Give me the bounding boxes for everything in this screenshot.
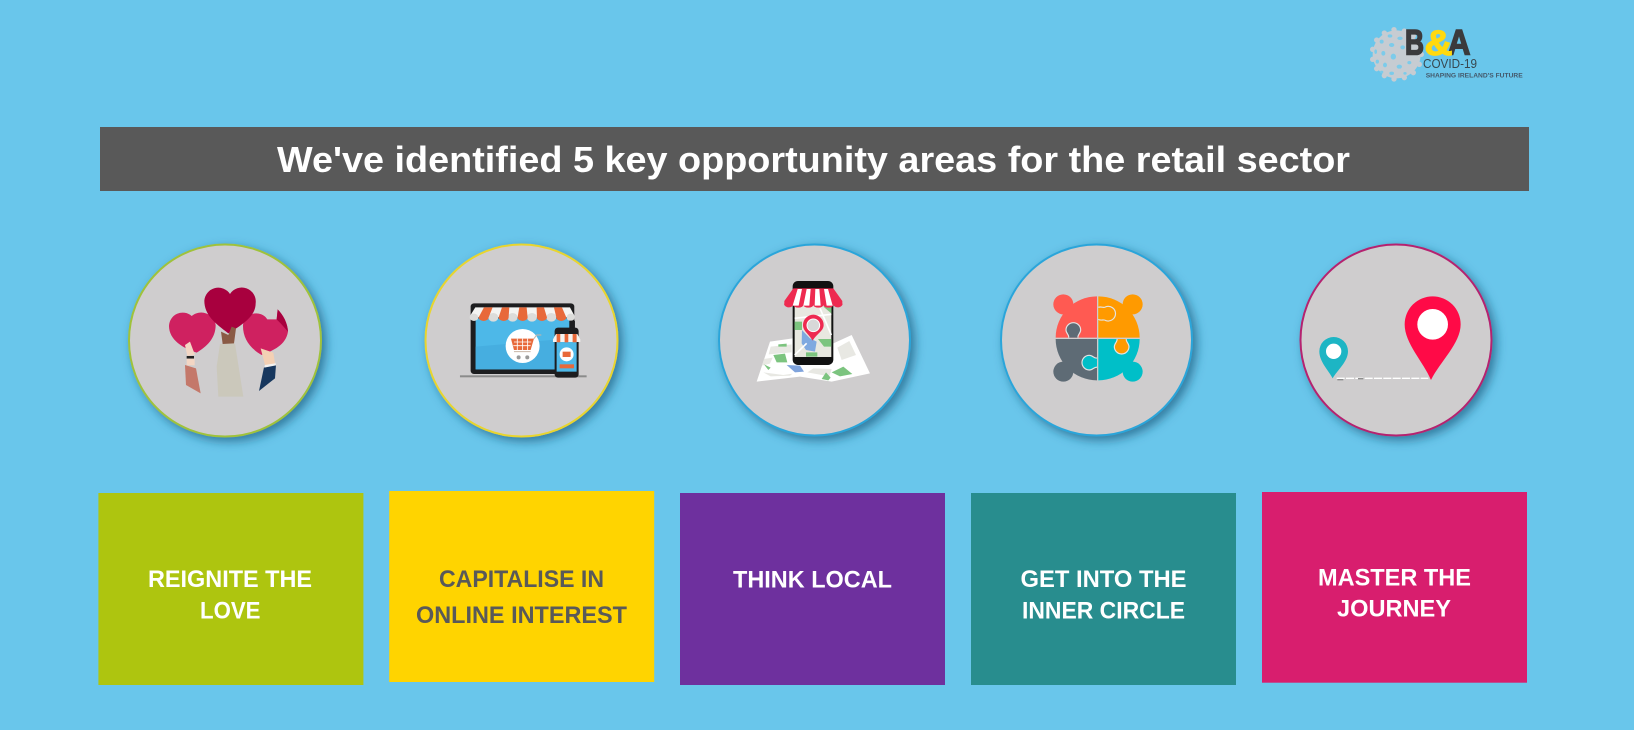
logo: B&A COVID-19 Shaping Ireland's Future: SHAPING IRELAND'S FUTURE [1426, 73, 1523, 80]
box: capitalise in online interest: CAPITALISE IN [439, 566, 604, 593]
logo: B&A COVID-19 Shaping Ireland's Future: A [1448, 24, 1470, 62]
icon circle: local map [719, 244, 910, 436]
box: reignite the love: LOVE [200, 598, 260, 624]
icon circle: puzzle [1001, 244, 1192, 436]
logo: B&A COVID-19 Shaping Ireland's Future: B [1405, 24, 1424, 62]
box: reignite the love [98, 493, 363, 685]
box: get into the inner circle: INNER CIRCLE [1022, 598, 1185, 624]
icon: laptop and phone storefront [460, 303, 587, 378]
logo: B&A COVID-19 Shaping Ireland's Future: & [1424, 24, 1452, 63]
box: think local: THINK LOCAL [733, 566, 892, 594]
box: get into the inner circle: GET INTO THE [1020, 566, 1186, 593]
box: master the journey: JOURNEY [1337, 596, 1451, 623]
box: reignite the love: REIGNITE THE [148, 566, 312, 593]
icon: phone shop on a map [757, 281, 870, 382]
box: master the journey: MASTER THE [1318, 565, 1471, 592]
box: think local [680, 493, 945, 685]
icon circle: hearts (reignite the love) [129, 244, 321, 436]
logo: B&A COVID-19 Shaping Ireland's Future [1370, 24, 1523, 82]
icon: four piece jigsaw [1053, 294, 1143, 382]
box: master the journey [1262, 492, 1527, 683]
box: capitalise in online interest: ONLINE INTEREST [416, 602, 627, 629]
logo: B&A COVID-19 Shaping Ireland's Future: COVID-19 [1423, 57, 1477, 71]
icon circle: journey pins [1300, 244, 1492, 436]
box: capitalise in online interest [389, 491, 654, 682]
icon: two map pins with dashed route [1319, 296, 1461, 380]
icon: hands holding hearts [169, 288, 288, 397]
title banner [100, 127, 1529, 191]
box: get into the inner circle [971, 493, 1236, 685]
title banner: We've identified 5 key opportunity areas for the retail sector [277, 139, 1350, 180]
icon: virus sphere [1370, 27, 1424, 82]
icon circle: online shop [426, 244, 618, 436]
